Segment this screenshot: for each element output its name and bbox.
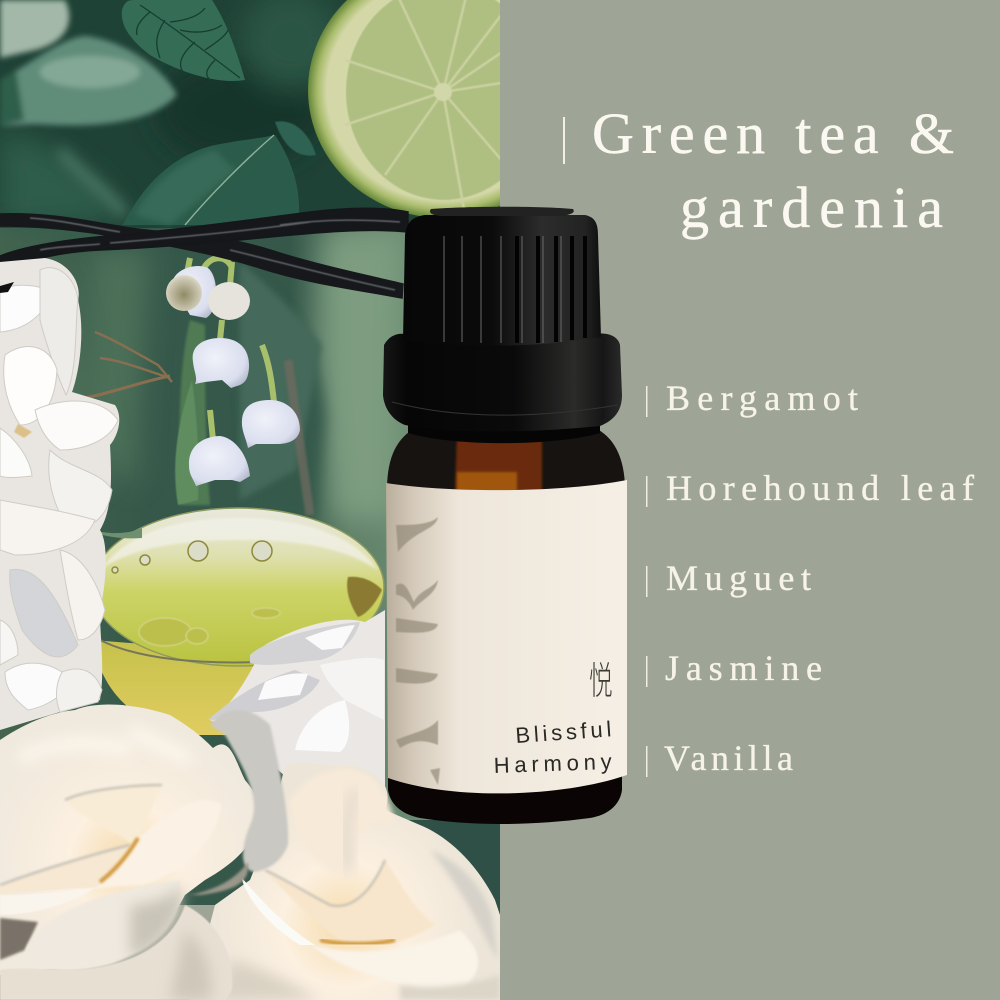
flower centre (14, 424, 32, 438)
beige bud (166, 275, 202, 311)
product name: Blissful (515, 716, 612, 748)
vanilla pods (0, 208, 408, 298)
ripple in oil (139, 608, 280, 646)
ingredient: Bergamot: Bergamot (666, 378, 858, 418)
jasmine petals (0, 268, 118, 712)
dropper neck (408, 425, 600, 443)
bell 5 (189, 436, 250, 486)
bell 4 (242, 400, 300, 448)
blurred large mint leaf (0, 36, 177, 126)
muguet leaf and stems (175, 258, 322, 515)
title (563, 101, 954, 240)
small leaf tip (101, 528, 142, 538)
amber glow (457, 472, 517, 492)
sharp mint leaf lower (123, 135, 299, 225)
glass shoulder (387, 428, 625, 490)
essential oil bottle (383, 207, 627, 824)
grey petal column (210, 710, 288, 872)
product name: Harmony (493, 749, 612, 778)
ingredient list (646, 378, 974, 778)
ribbed cap (403, 207, 601, 346)
lower foliage backdrop (0, 225, 500, 930)
lime slice (308, 0, 500, 216)
highlight on upper glass (100, 518, 378, 570)
title: gardenia (680, 175, 943, 240)
ingredient: Horehound leaf: Horehound leaf (666, 468, 974, 508)
back bell (172, 266, 216, 318)
rose inner petals (68, 787, 159, 843)
bottle base (388, 770, 622, 824)
vanilla tip (0, 282, 14, 293)
product name (493, 716, 612, 778)
ingredient: Vanilla: Vanilla (664, 738, 793, 778)
flower mass (0, 258, 119, 730)
ingredient: Jasmine: Jasmine (665, 648, 822, 688)
photo collage of ingredients (0, 0, 500, 1000)
kanji on label: 悦 (589, 651, 613, 706)
amber oil window (455, 432, 542, 492)
gardenia white flowers right (208, 610, 385, 790)
dark gap under roses (0, 918, 38, 960)
jasmine stamens (86, 331, 173, 398)
sharp mint leaf top (122, 0, 245, 81)
gardenia rose bottom left (0, 705, 288, 1000)
ingredient: Muguet: Muguet (666, 558, 811, 598)
blurred pale leaf top left (0, 0, 69, 58)
glass bowl of green tea oil (92, 508, 384, 735)
title: Green tea & (592, 101, 954, 166)
bowl body (101, 641, 254, 735)
shadow inside bowl (347, 577, 382, 617)
jasmine flowers left (0, 258, 119, 730)
upper mint foliage backdrop (0, 0, 500, 228)
collar (383, 333, 622, 432)
lily of the valley (166, 258, 322, 515)
white bud (208, 282, 250, 320)
lower rim line (100, 640, 260, 662)
cream label (386, 480, 627, 793)
gardenia rose bottom right (190, 763, 500, 1000)
bowl surface (92, 508, 384, 666)
small mint leaf (275, 121, 316, 156)
bell 3 (193, 338, 249, 388)
faded calligraphy on label (396, 517, 440, 785)
rose lower petals (25, 880, 181, 971)
bubbles (112, 541, 272, 573)
